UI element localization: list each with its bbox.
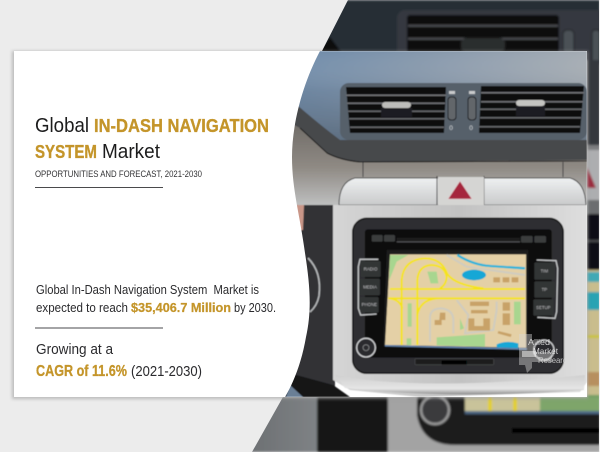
bottom card slot <box>415 359 494 365</box>
market size statement: expected to reach <box>36 301 128 315</box>
map buildings <box>435 277 518 337</box>
title: IN-DASH NAVIGATION <box>94 115 269 136</box>
enlarged air vent <box>397 10 600 66</box>
CAGR statement <box>36 341 202 380</box>
watermark: Allied Market Research <box>519 334 571 373</box>
left hardware buttons: MEDIA <box>363 284 377 289</box>
air vent right <box>479 86 584 133</box>
screen lower edge <box>385 346 527 349</box>
market size statement: Global In-Dash Navigation System Market is <box>36 283 259 297</box>
main photo: car dashboard with navigation unit <box>285 51 587 397</box>
vent adjusters: 0 <box>449 125 453 132</box>
air vent left <box>346 87 446 133</box>
vent adjusters <box>448 91 476 132</box>
inner black fascia <box>365 229 552 358</box>
silver bezel <box>333 205 587 397</box>
hazard button panel <box>339 176 586 205</box>
silver bottom lip <box>335 375 585 395</box>
right hardware buttons <box>533 260 558 318</box>
CAGR statement: (2021-2030) <box>131 363 202 380</box>
blue-grey upper dashboard <box>298 51 587 141</box>
head unit body <box>353 218 563 373</box>
vent surround <box>340 83 587 140</box>
CAGR statement: CAGR of 11.6% <box>36 363 127 380</box>
watermark: Allied Market Research: Research <box>538 355 571 365</box>
subtitle: OPPORTUNITIES AND FORECAST, 2021-2030 <box>35 169 202 179</box>
lower background: grey, black and silver <box>240 396 600 452</box>
vent adjusters: 0 <box>469 125 473 132</box>
watermark: Allied Market Research: Market <box>533 346 559 356</box>
title: SYSTEM <box>35 141 97 162</box>
dark lower corner <box>286 375 350 397</box>
map screen <box>383 250 528 350</box>
divider lines <box>363 162 563 177</box>
title: Market <box>102 140 160 163</box>
right hardware buttons: TIM <box>541 268 548 273</box>
power knob <box>357 338 375 357</box>
lower beige-grey dash section <box>292 125 587 206</box>
dark dash lip <box>295 106 587 162</box>
right hardware buttons: SETUP <box>536 305 551 310</box>
right strip behind card <box>587 60 600 452</box>
market size statement <box>36 283 276 315</box>
chrome ring at left <box>308 258 320 312</box>
dark corner of top band <box>322 38 340 51</box>
top buttons and CD slot <box>372 235 546 243</box>
title <box>35 114 269 163</box>
hand fragment <box>295 205 304 230</box>
white card panel <box>14 51 587 397</box>
map grey roads <box>430 255 525 342</box>
right volume knob <box>534 340 554 360</box>
map green areas <box>389 255 521 347</box>
left hardware buttons: PHONE <box>362 302 377 307</box>
background photo: enlarged car dashboard <box>240 0 600 452</box>
dark panel left of bezel <box>285 205 335 397</box>
title: Global <box>35 114 89 137</box>
right hardware buttons: TP <box>542 287 547 292</box>
hazard triangle icon <box>448 181 472 199</box>
market size statement: $35,406.7 Million <box>131 300 231 315</box>
card shadow <box>12 51 588 399</box>
top dashboard band <box>323 0 599 51</box>
navigation head unit <box>353 218 563 373</box>
map water <box>457 255 525 348</box>
CAGR statement: Growing at a <box>36 341 114 358</box>
left hardware buttons: RADIO <box>364 267 378 272</box>
left hardware buttons <box>358 259 381 315</box>
market size statement: by 2030. <box>234 301 276 315</box>
map yellow roads <box>388 258 525 345</box>
watermark: Allied Market Research: Allied <box>528 338 550 347</box>
